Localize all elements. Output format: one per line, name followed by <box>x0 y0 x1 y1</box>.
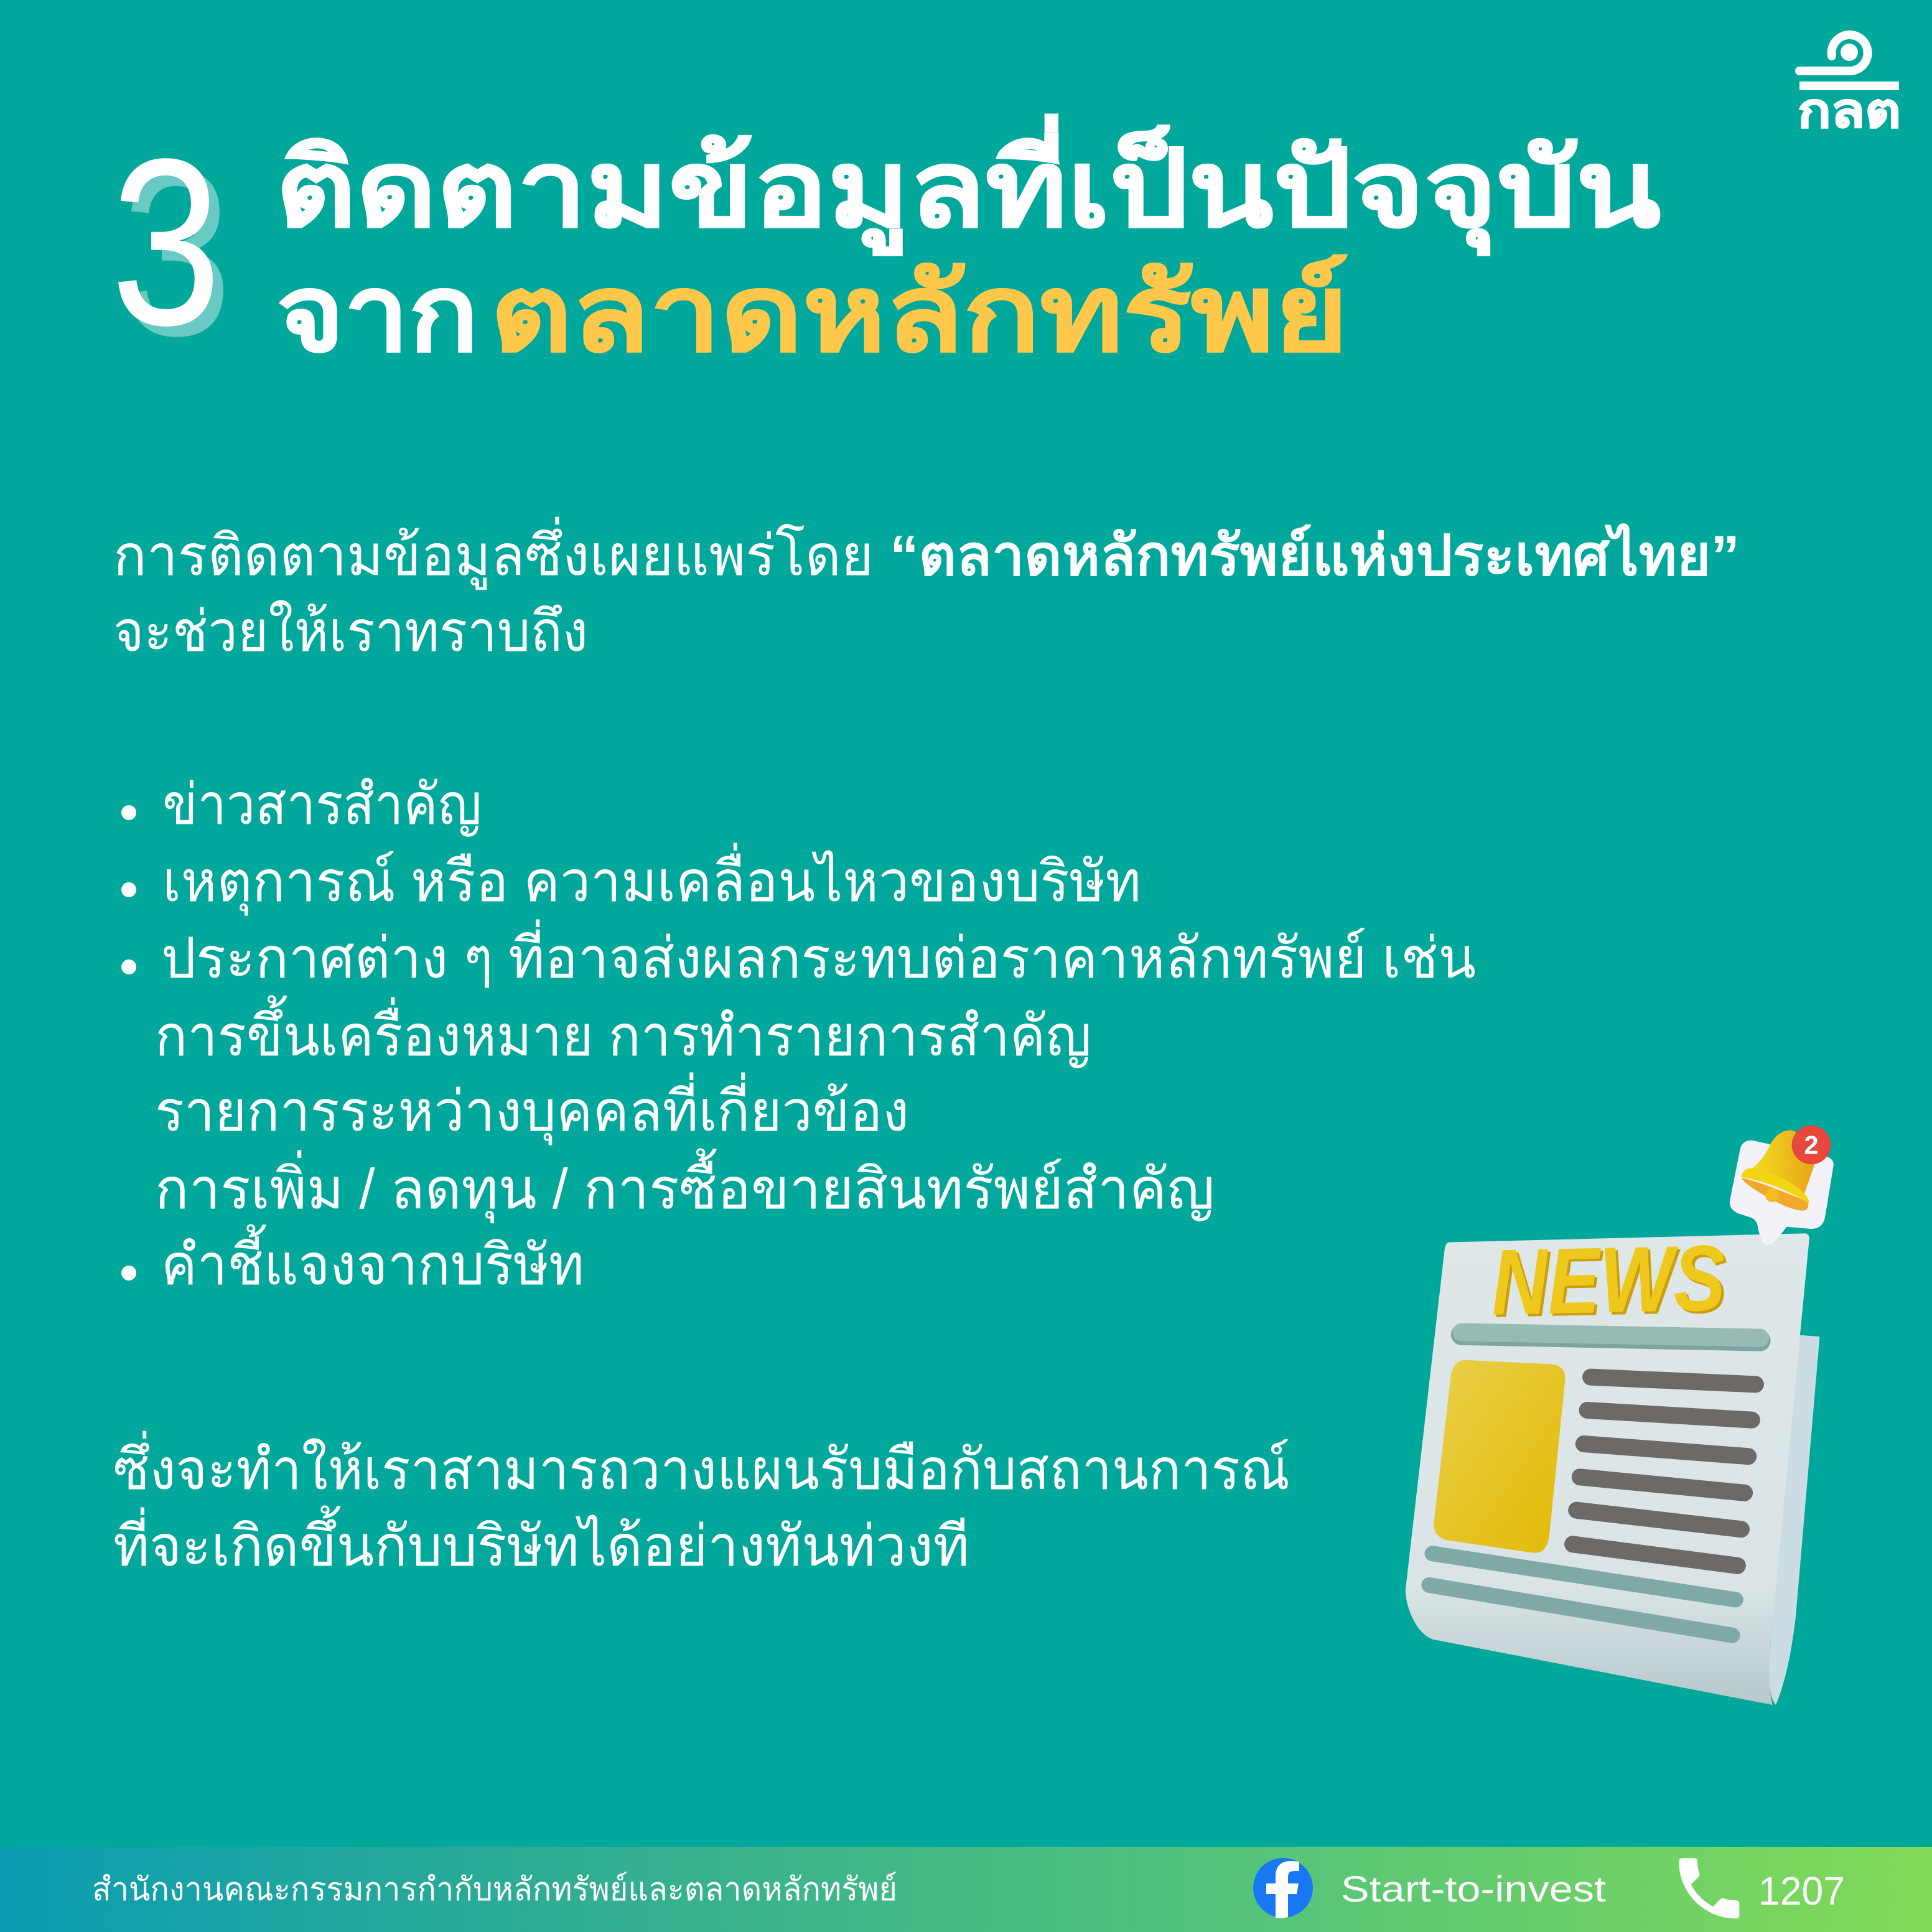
grey text lines <box>1573 1377 1755 1566</box>
bullet list: ข่าวสารสำคัญ <box>162 773 482 838</box>
NEWS headline text: NEWS <box>1490 1225 1727 1335</box>
logo letters: กลต <box>1798 85 1901 138</box>
facebook page name: Start-to-invest <box>1341 1869 1606 1910</box>
icon: notification bell in speech bubble <box>1730 1126 1834 1245</box>
bullet list <box>121 773 1476 1297</box>
newspaper front page <box>1406 1233 1809 1705</box>
bullet list: ประกาศต่าง ๆ ที่อาจส่งผลกระทบต่อราคาหลักทรัพย์ เช่น <box>161 919 1476 990</box>
bell rim <box>1741 1168 1809 1203</box>
bell clapper <box>1765 1188 1780 1202</box>
illustration: newspaper <box>1406 1225 1819 1705</box>
icon: phone <box>1679 1858 1739 1918</box>
newspaper back fold <box>1769 1335 1819 1705</box>
bullet list: การเพิ่ม / ลดทุน / การซื้อขายสินทรัพย์สำคัญ <box>155 1148 1215 1224</box>
intro paragraph: จะช่วยให้เราทราบถึง <box>113 600 588 663</box>
title <box>276 114 1661 373</box>
title: จาก <box>277 254 478 373</box>
intro paragraph: การติดตามข้อมูลซึ่งเผยแพร่โดย <box>113 516 874 590</box>
teal text lines <box>1429 1554 1735 1635</box>
closing paragraph: ที่จะเกิดขึ้นกับบริษัทได้อย่างทันท่วงที <box>113 1505 969 1578</box>
bullet list: การขึ้นเครื่องหมาย การทำรายการสำคัญ <box>155 995 1091 1069</box>
intro paragraph: “ตลาดหลักทรัพย์แห่งประเทศไทย” <box>890 523 1740 587</box>
bullet list: คำชี้แจงจากบริษัท <box>161 1224 584 1297</box>
bell mouth <box>1742 1178 1808 1211</box>
title: ตลาดหลักทรัพย์ <box>490 254 1348 373</box>
intro paragraph <box>113 516 1740 663</box>
logo swirl mark <box>1799 35 1899 90</box>
bullet markers <box>121 805 136 1281</box>
NEWS headline text: NEWS <box>1493 1228 1729 1337</box>
badge number: 2 <box>1804 1131 1819 1160</box>
closing paragraph <box>113 1430 1290 1578</box>
big numeral 3: 3 <box>121 119 232 385</box>
red badge <box>1792 1126 1831 1164</box>
bullet list: รายการระหว่างบุคคลที่เกี่ยวข้อง <box>155 1072 909 1146</box>
footer bar <box>0 1847 1932 1932</box>
bullet list: เหตุการณ์ หรือ ความเคลื่อนไหวของบริษัท <box>162 842 1141 917</box>
closing paragraph: ซึ่งจะทำให้เราสามารถวางแผนรับมือกับสถานการณ์ <box>113 1430 1290 1501</box>
hotline number: 1207 <box>1758 1869 1845 1913</box>
logo: SEC Thailand <box>1798 35 1901 138</box>
footer organisation name: สำนักงานคณะกรรมการกำกับหลักทรัพย์และตลาดหลักทรัพย์ <box>92 1872 897 1908</box>
title: ติดตามข้อมูลที่เป็นปัจจุบัน <box>276 114 1661 256</box>
headline bar <box>1462 1332 1760 1341</box>
icon: facebook <box>1253 1858 1313 1918</box>
bell dome <box>1752 1131 1815 1193</box>
yellow picture block <box>1434 1360 1565 1553</box>
big numeral 3: 3 <box>111 109 222 375</box>
speech bubble <box>1730 1141 1834 1245</box>
